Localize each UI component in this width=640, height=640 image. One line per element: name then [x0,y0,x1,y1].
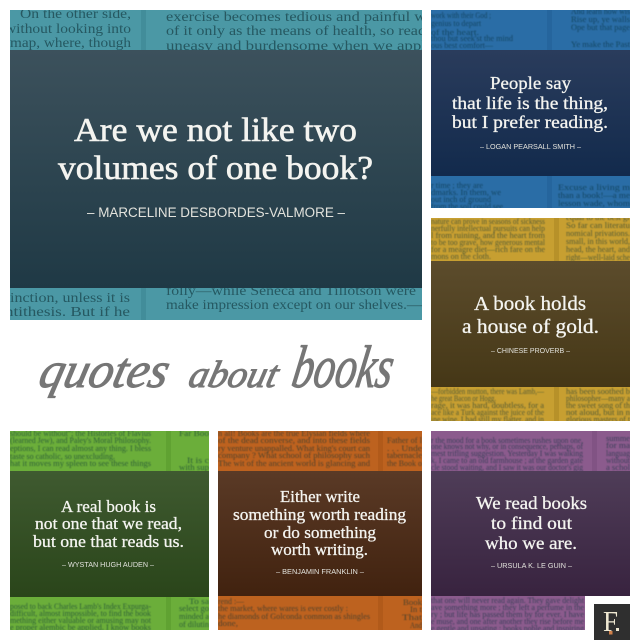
panel: Chinese proverb: So far can literatu [566,221,630,230]
panel: Chinese proverb: the sweet song of th [566,401,630,410]
panel: Franklin quote: . . . Unde [387,444,423,453]
panel: Logan Pearsall Smith quote: lesson wade, whom [558,199,631,208]
quote text [476,493,587,553]
panel: Logan Pearsall Smith quote: And learn how wis [571,7,630,16]
panel: Logan Pearsall Smith quote: Rise up, ye walls [571,15,630,24]
panel: Desbordes-Valmore quote: without looking into [5,22,131,37]
panel: Auden quote: with sup [179,463,209,472]
panel: Logan Pearsall Smith quote [431,7,631,211]
quote text: A real book is [61,497,156,516]
panel: Logan Pearsall Smith quote: genius to depart [431,19,482,28]
panel: Le Guin quote: e muse, and one after another they rise before me [431,617,584,626]
attribution: – CHINESE PROVERB – [491,348,570,355]
attribution: – LOGAN PEARSALL SMITH – [480,144,581,151]
quote text: who we are. [485,533,577,553]
panel: Desbordes-Valmore quote [5,7,427,320]
panel: Logan Pearsall Smith quote: dmarks. In them, we [431,188,501,197]
panel: Chinese proverb: head, the heart, and [566,245,630,254]
panel: Franklin quote: That [402,613,423,622]
panel: Desbordes-Valmore quote: On the other side, [20,7,131,22]
quote text: not one that we read, [35,514,182,533]
panel: Franklin quote: rend :— [218,597,245,606]
panel: Chinese proverb: ace like a Turk against the juice of the [431,408,544,417]
panel: Auden quote: difficult, almost impossible, to find the book [10,609,151,618]
panel: Logan Pearsall Smith quote: work with their God ; [431,11,491,20]
panel: Le Guin quote: that one will never read again. They gave delight [431,596,585,605]
panel: Chinese proverb: has been soothed b [566,387,630,396]
panel: Franklin quote: the market, where wares is ever costly : [218,604,348,613]
quote text: A book holds [474,293,586,315]
panel: Le Guin quote: ave something more ; they left a perfume in the [431,603,584,612]
quote text [58,112,373,187]
panel: Chinese proverb: small, in this world, [566,237,630,246]
panel: Desbordes-Valmore quote: exercise becomes tedious and painful w [166,10,427,25]
quote text: something worth reading [233,505,407,524]
panel: Desbordes-Valmore quote: make impression except on our shelves.— [166,298,423,313]
quote text: but one that reads us. [33,532,184,551]
panel: Chinese proverb: mons on the cloth. [431,252,491,261]
panel: Chinese proverb: he great Bacon or Hogg. [431,394,496,403]
panel: Auden quote: should be without"; the Histories of Flavius [10,429,151,438]
panel: Franklin quote: the Book o [387,459,422,468]
panel: Logan Pearsall Smith quote: out inch of ground [431,195,491,204]
panel: Chinese proverb: to be too grave, how generous mental [431,238,546,247]
attribution: – MARCELINE DESBORDES-VALMORE – [87,205,345,220]
panel overlay [431,261,630,387]
panel: Auden quote: Far Boo [179,429,209,438]
panel: Chinese proverb: right—well-laid sche [566,253,630,262]
panel overlay [431,471,630,596]
panel: Franklin quote: done, [218,619,238,628]
panel: Auden quote: mething either valuable or amusing may not [10,616,152,625]
panel: Chinese proverb: nerfully intellectual pursuits can help [431,224,545,233]
panel overlay [431,50,630,176]
panel: Le Guin quote: without [606,456,631,465]
panel: Le Guin quote: r the mood for a book sometimes rushes upon one, [431,436,583,445]
panel: Le Guin quote [431,431,631,633]
panel: Logan Pearsall Smith quote: than a book!—a me [558,191,631,200]
panel: Franklin quote: ry venture unappalled. What king's court can [218,444,370,453]
quote text: People say [490,73,571,93]
panel: Chinese proverb: l from ruining, and the heart from [431,231,546,240]
panel: Franklin quote: The wit of the ancient world is glancing and [218,459,370,468]
quote text: worth writing. [271,540,368,559]
panel: Logan Pearsall Smith quote: Ye make the Past [571,40,631,49]
quote text: volumes of one book? [58,150,373,187]
icon: logo: F [603,607,618,638]
quote text [462,293,599,338]
panel: Franklin quote: company ? What school of philosophy such [218,451,370,460]
panel: Auden quote: posed to back Charles Lamb's Index Expurga- [10,602,151,611]
panel: Le Guin quote: ry ; but life has passed them by for ever. I have [431,610,584,619]
panel overlay [10,471,209,597]
quote text: a house of gold. [462,316,599,338]
quote text [452,73,608,132]
panel: Auden quote: e proper alembic be applied. I know books [10,623,151,632]
quote text: that life is the thing, [452,93,608,113]
panel: Le Guin quote: mest trifling suggestion. Yesterday I was walking [431,449,583,458]
panel: Chinese proverb: ine wine. I had still my flatter, and in [431,415,544,424]
panel: Auden quote: taste so catholic, so unexcluding. [10,452,115,461]
panel: Chinese proverb: not aloud, but in n [566,408,630,417]
panel: Logan Pearsall Smith quote: of the heart. [431,28,479,37]
panel: Franklin quote: of the dead converse, and into these fields [218,436,370,445]
panel: Logan Pearsall Smith quote: r time ; they are [431,181,483,190]
quote text: or do something [264,523,376,542]
panel: Desbordes-Valmore quote: folly—while Seneca and Tillotson were [166,284,416,299]
panel: Desbordes-Valmore quote: uneasy and burdensome when we appl [166,39,426,54]
panel: Logan Pearsall Smith quote: thou but seek'st the mind [431,34,513,43]
attribution: – BENJAMIN FRANKLIN – [276,569,364,576]
attribution: – WYSTAN HUGH AUDEN – [62,562,154,569]
panel: Logan Pearsall Smith quote: ous best comfort— [431,41,494,50]
quote text: We read books [476,493,587,513]
panel: Chinese proverb: nomical privations. [566,229,630,238]
panel: Franklin quote: he diamonds of Golconda common as shingles [218,612,370,621]
quote text [233,487,407,559]
panel: Auden quote: eptions, I can read almost any thing. I bless [10,444,151,453]
panel: Le Guin quote: e gentle and unsating : books noble and inspiring [431,624,584,633]
quote text: but I prefer reading. [452,112,608,132]
panel overlay [10,50,422,288]
panel: Auden quote: hat it moves my spleen to see these things [10,459,151,468]
panel: Franklin quote: tabernacle [387,451,422,460]
panel: Chinese proverb: —forbidden mutton, there was Lamb,— [430,387,545,396]
attribution: – URSULA K. LE GUIN – [491,563,572,570]
title: quotes about books: quotes [34,343,176,398]
quote text: to find out [491,513,572,533]
panel: Auden quote: of dilutin [179,620,209,629]
panel: Auden quote: To sa [189,597,210,606]
panel: Chinese proverb: rage, it was hard, doubtless, for a [431,401,544,410]
panel: Chinese proverb: glorious masters of t [566,415,631,424]
panel: Auden quote: select go [179,604,209,613]
panel: Franklin quote: And [410,621,422,630]
icon: logo [594,604,630,640]
panel: Chinese proverb [430,213,631,424]
panel: Logan Pearsall Smith quote: Ope but that page [571,23,630,32]
panel: Franklin quote: In t [410,605,423,614]
panel: Le Guin quote: cle stood waiting, and I saw it was our doctor's gig [431,463,583,472]
panel: Auden quote: (learned Jew), and Paley's Moral Philosophy. [10,436,151,445]
title: quotes about books [34,334,399,401]
panel: Desbordes-Valmore quote: of it only as the means of health, so read [166,24,426,39]
panel: Auden quote: minded a [179,612,209,621]
quote text: Either write [280,487,360,506]
panel overlay [218,471,422,596]
panel: Franklin quote: Book [403,598,422,607]
panel: Le Guin quote: for ma [606,441,631,450]
panel: Franklin quote: n all! Books are the true Elysian fields where [218,429,370,438]
panel: Le Guin quote: one knows not why, or in consequence, perhaps, of [431,442,583,451]
title: quotes about books: about [185,355,284,396]
panel: Auden quote [10,429,210,632]
panel: Franklin quote [218,429,423,630]
panel: Logan Pearsall Smith quote: from the soil could see [431,202,503,211]
panel: Franklin quote: Father of l [387,436,423,445]
title: quotes about books: books [288,334,399,401]
panel: Chinese proverb: equal to the best gr [566,213,630,222]
panel: Logan Pearsall Smith quote: Excuse a living m [558,183,631,192]
panel: Chinese proverb: for a meagre diet—rich fare on the [431,245,545,254]
quote text [33,497,184,551]
panel: Desbordes-Valmore quote: map, where, though [10,36,131,51]
panel: Chinese proverb: philosopher—many a [566,394,630,403]
quote text: Are we not like two [74,112,357,149]
panel: Chinese proverb: nature can prove in seasons of sickness [431,217,545,226]
panel: Le Guin quote: languag [606,449,630,458]
panel: Desbordes-Valmore quote: ntithesis. But if he [5,305,130,320]
panel: Desbordes-Valmore quote: inction, unless it is [10,291,130,306]
panel: Le Guin quote: a schol [606,463,631,472]
panel: Le Guin quote: k. I came to an old farmhouse ; at the garden gate [431,456,583,465]
panel: Le Guin quote: summe [606,434,630,443]
panel: Auden quote: It is c [187,456,210,465]
